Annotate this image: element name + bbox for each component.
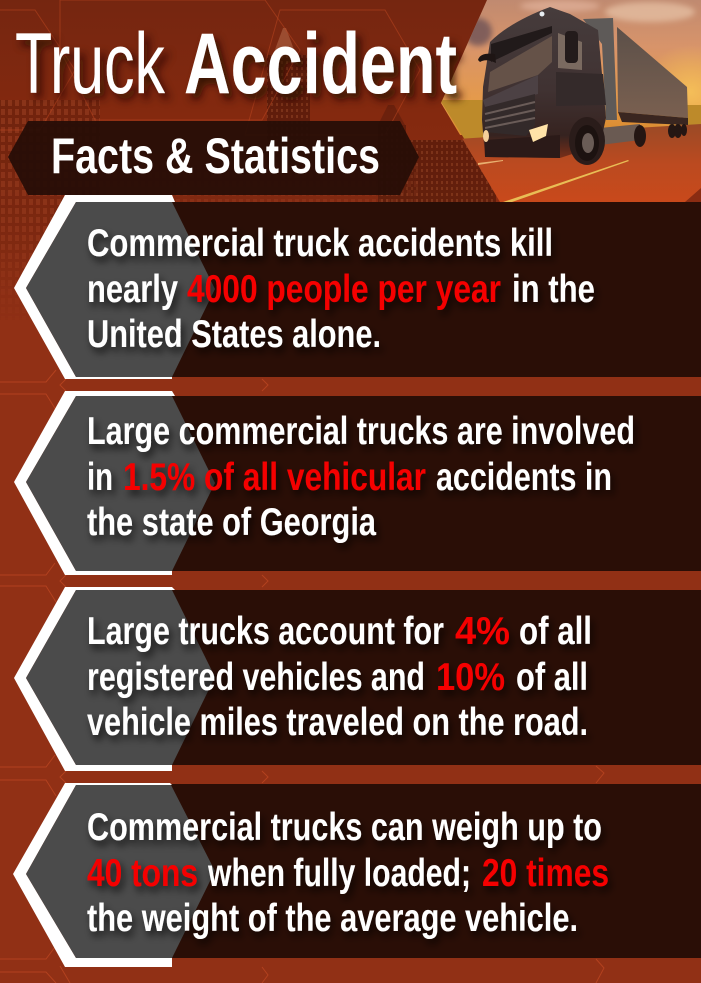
fact panel 4: 20 times <box>482 852 609 895</box>
chassis and rear wheels <box>600 124 640 145</box>
sun glow <box>663 54 701 126</box>
front wheel <box>575 125 599 161</box>
side window <box>558 33 582 70</box>
fact panel 4 <box>13 783 701 967</box>
fact panel 4: 40 tons <box>87 852 198 895</box>
side mirror <box>565 31 578 63</box>
fact panel 2 <box>14 391 701 575</box>
fact panel 1: Commercial truck accidents kill <box>87 222 553 265</box>
front hood <box>483 75 538 107</box>
subtitle banner: Facts & Statistics <box>51 128 380 184</box>
fact panel 1 <box>14 195 701 379</box>
front bumper <box>485 135 560 158</box>
fact panel 4: when fully loaded; <box>207 852 471 895</box>
horizon fields <box>442 100 484 138</box>
fact panel 2: 1.5% of all vehicular <box>123 456 426 499</box>
beacon <box>540 12 544 16</box>
grille <box>485 94 535 136</box>
fact panel 3: of all <box>516 656 588 699</box>
windshield <box>488 36 552 92</box>
fact panel 1: in the <box>512 268 595 311</box>
headlight <box>529 124 548 142</box>
exhaust stack <box>583 18 617 120</box>
cab <box>482 7 606 158</box>
side door shading <box>556 72 606 106</box>
photo: truck on road at sunset <box>440 0 701 203</box>
fact panel 2: accidents in <box>436 456 612 499</box>
sun visor <box>491 26 552 62</box>
title: Accident <box>184 16 457 112</box>
trailer <box>617 27 688 118</box>
title <box>15 16 457 112</box>
sky <box>440 0 701 135</box>
fact panel 1: nearly <box>87 268 178 311</box>
clouds <box>464 0 695 46</box>
lower photo band <box>502 202 685 226</box>
fact panel 3: 10% <box>436 656 505 699</box>
subtitle banner <box>8 121 419 195</box>
fact panel 2: in <box>87 456 113 499</box>
front wheel arch <box>569 117 605 165</box>
fact panel 3 <box>14 587 701 771</box>
left mirror <box>478 54 496 63</box>
fact panel 3: Large trucks account for <box>87 610 444 653</box>
fact panel 2: the state of Georgia <box>87 501 376 544</box>
fact panel 1: United States alone. <box>87 313 381 356</box>
city skyline <box>0 28 496 320</box>
fact panel 3: registered vehicles and <box>87 656 425 699</box>
fact panel 1: 4000 people per year <box>187 268 501 311</box>
road <box>440 124 701 203</box>
fact panel 4: the weight of the average vehicle. <box>87 897 578 940</box>
title: Truck <box>15 16 166 112</box>
road lines <box>503 160 629 202</box>
fact panel 3: of all <box>519 610 592 653</box>
fact panel 3: 4% <box>455 610 510 653</box>
